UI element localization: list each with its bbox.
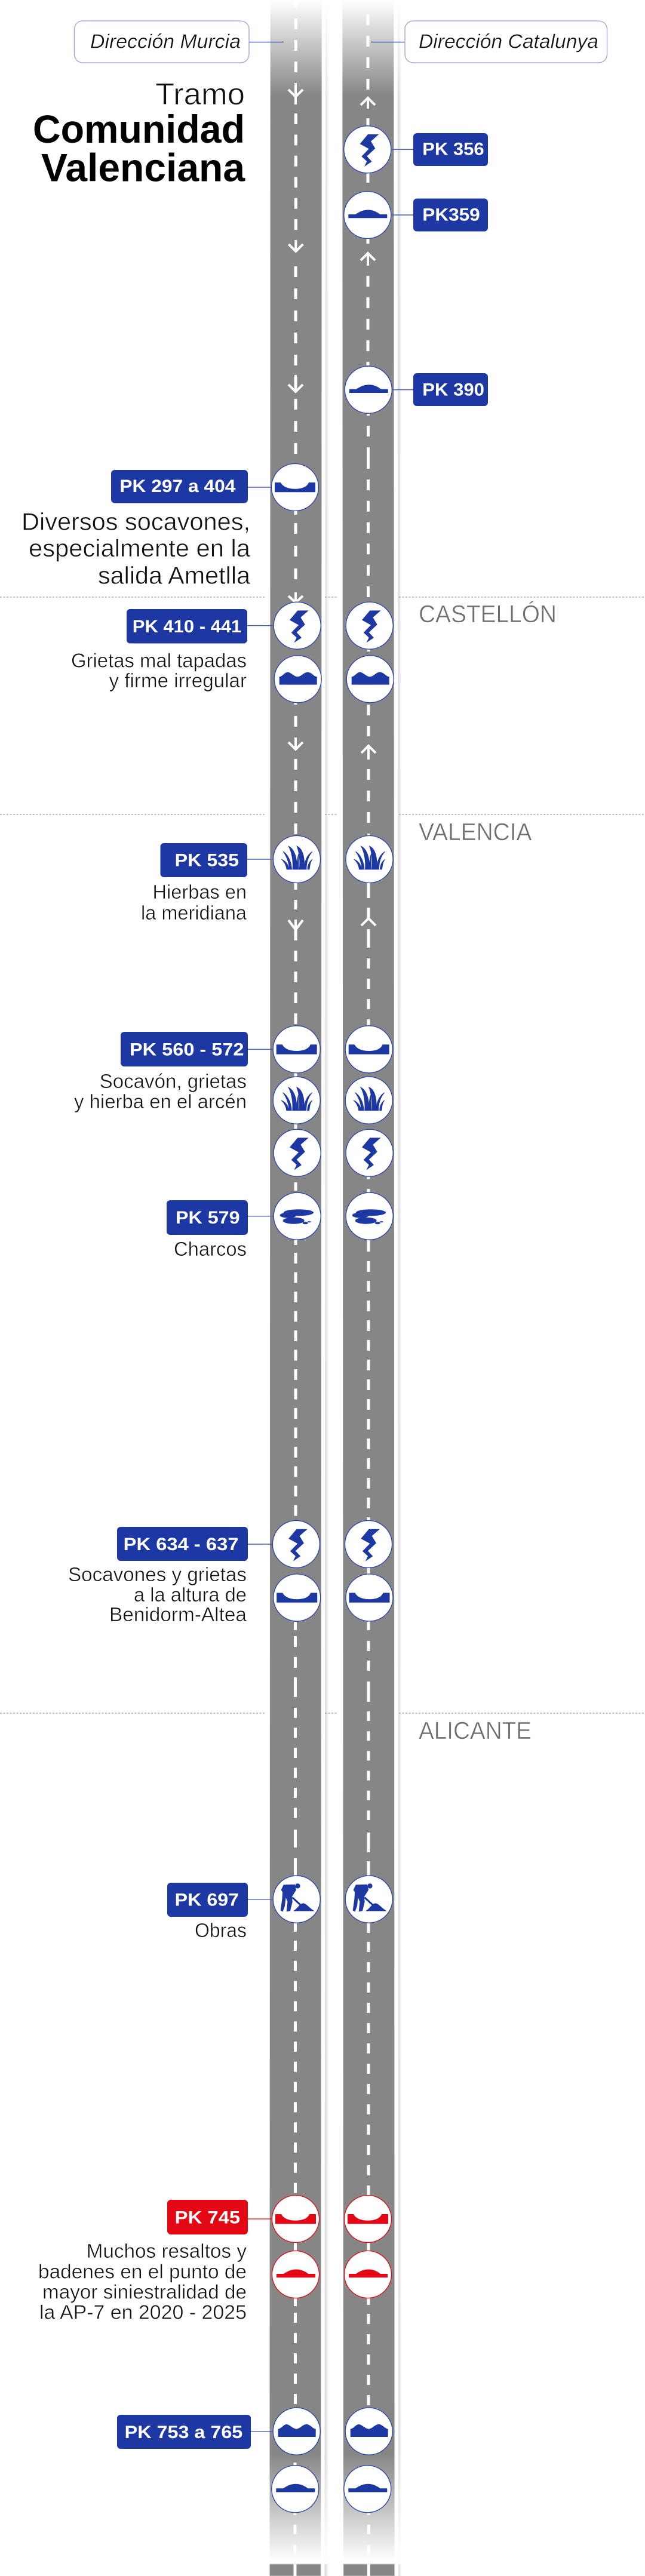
road: left carriageway	[270, 0, 322, 2576]
marker: PK 390: PK 390	[422, 380, 484, 400]
description: obras: Obras	[195, 1919, 247, 1941]
sign: roadworks right	[345, 1876, 392, 1923]
marker: PK 753 a 765	[117, 2415, 274, 2449]
road: right carriageway	[342, 0, 395, 2576]
sign: bump PK 390	[345, 366, 392, 413]
sign: pothole PK 560 left	[273, 1026, 320, 1073]
marker: PK 535: PK 535	[175, 850, 239, 871]
description: hierbas: Hierbas en	[153, 881, 247, 903]
sign: grass PK 535 right	[346, 836, 393, 883]
direction label: Catalunya: Dirección Catalunya	[419, 30, 598, 53]
marker: PK 745	[167, 2200, 272, 2234]
sign: pothole PK 634 left	[274, 1574, 321, 1621]
marker: PK 297 a 404	[111, 470, 272, 503]
marker: PK 356	[391, 133, 488, 166]
sign: uneven surface left	[274, 656, 321, 703]
description: diversos socavones: Diversos socavones,	[22, 508, 250, 535]
sign: pothole PK 560 right	[345, 1026, 392, 1073]
sign: crack PK 634 left	[272, 1520, 320, 1568]
marker: PK 560 - 572	[121, 1032, 274, 1066]
sign: bump PK 753 right	[344, 2466, 391, 2513]
marker: PK 579: PK 579	[176, 1208, 240, 1228]
direction label: Murcia: Dirección Murcia	[90, 30, 241, 53]
marker: PK 410 - 441	[127, 609, 274, 644]
sign: pothole PK 297	[271, 463, 319, 511]
marker: PK 634 - 637: PK 634 - 637	[124, 1535, 239, 1554]
sign: red pothole left	[272, 2195, 319, 2243]
title: Valenciana	[41, 146, 245, 190]
description: socavones y grietas: Socavones y grietas	[68, 1563, 247, 1585]
sign: grass PK 560 left	[273, 1077, 320, 1124]
direction label: Catalunya	[371, 21, 607, 63]
description: socavón: y hierba en el arcén	[74, 1090, 247, 1112]
marker: PK 410 - 441: PK 410 - 441	[133, 617, 241, 637]
region label: Castellón: CASTELLÓN	[419, 600, 557, 628]
description: diversos socavones: salida Ametlla	[98, 562, 250, 589]
marker: PK 535	[160, 843, 274, 877]
marker: PK 356: PK 356	[422, 140, 484, 159]
marker: PK 359	[391, 198, 488, 232]
title: Comunidad	[33, 107, 245, 151]
sign: red bump right	[344, 2251, 392, 2298]
sign: crack PK 410 right	[346, 602, 393, 649]
marker: PK 745: PK 745	[175, 2208, 240, 2227]
region label: Alicante: ALICANTE	[419, 1717, 532, 1744]
sign: crack PK 560 left	[274, 1129, 321, 1176]
direction label: Murcia	[74, 21, 284, 63]
description: resaltos y badenes: la AP-7 en 2020 - 2025	[39, 2301, 247, 2323]
marker: PK 697: PK 697	[175, 1890, 239, 1910]
description: grietas: y firme irregular	[109, 669, 247, 691]
sign: crack PK 356	[344, 126, 391, 173]
sign: crack PK 560 right	[346, 1129, 393, 1176]
description: socavón: Socavón, grietas	[100, 1070, 247, 1092]
description: socavones y grietas	[68, 1563, 247, 1625]
description: grietas: Grietas mal tapadas	[71, 649, 247, 671]
region label: Valencia: VALENCIA	[419, 818, 532, 846]
sign: puddle left	[274, 1192, 321, 1240]
marker: PK 753 a 765: PK 753 a 765	[125, 2423, 242, 2442]
sign: uneven surface PK 753 right	[345, 2408, 392, 2455]
marker: PK 359: PK359	[422, 205, 480, 225]
arrows: left road, downward	[288, 83, 303, 932]
description: socavones y grietas: Benidorm-Altea	[109, 1603, 247, 1625]
sign: pothole PK 634 right	[346, 1574, 393, 1621]
sign: roadworks left	[273, 1876, 320, 1923]
description: diversos socavones	[22, 508, 250, 589]
road shoulder shadows	[322, 0, 406, 2576]
marker: PK 390	[392, 373, 488, 406]
sign: grass PK 535 left	[274, 836, 320, 883]
sign: crack PK 634 right	[345, 1520, 392, 1568]
description: resaltos y badenes: Muchos resaltos y	[87, 2240, 247, 2262]
sign: crack PK 410 left	[274, 602, 321, 649]
sign: red pothole right	[344, 2195, 392, 2243]
region divider lines	[0, 597, 645, 1713]
description: resaltos y badenes: badenes en el punto de	[38, 2260, 247, 2282]
description: hierbas: la meridiana	[141, 902, 247, 924]
sign: grass PK 560 right	[345, 1077, 392, 1124]
marker: PK 697	[167, 1883, 274, 1917]
lane dashes: left road	[295, 0, 296, 2576]
sign: puddle right	[346, 1192, 393, 1240]
description: diversos socavones: especialmente en la	[29, 534, 250, 562]
description: socavones y grietas: a la altura de	[134, 1584, 247, 1606]
title: Tramo	[155, 77, 245, 111]
sign: uneven surface PK 753 left	[273, 2408, 320, 2455]
marker: PK 634 - 637	[117, 1527, 273, 1561]
description: resaltos y badenes	[38, 2240, 247, 2323]
sign: red bump left	[272, 2251, 319, 2298]
description: hierbas	[141, 881, 247, 924]
description: socavón	[74, 1070, 247, 1112]
arrows: right road, upward	[361, 98, 376, 926]
sign: bump PK 359	[344, 191, 391, 239]
title	[33, 77, 245, 190]
description: charcos: Charcos	[174, 1238, 247, 1260]
description: resaltos y badenes: mayor siniestralidad de	[42, 2281, 247, 2303]
marker: PK 297 a 404: PK 297 a 404	[119, 477, 236, 496]
sign: bump PK 753 left	[272, 2466, 319, 2513]
sign: uneven surface right	[346, 656, 394, 703]
marker: PK 579	[167, 1200, 274, 1235]
description: grietas	[71, 649, 247, 691]
marker: PK 560 - 572: PK 560 - 572	[130, 1040, 244, 1059]
